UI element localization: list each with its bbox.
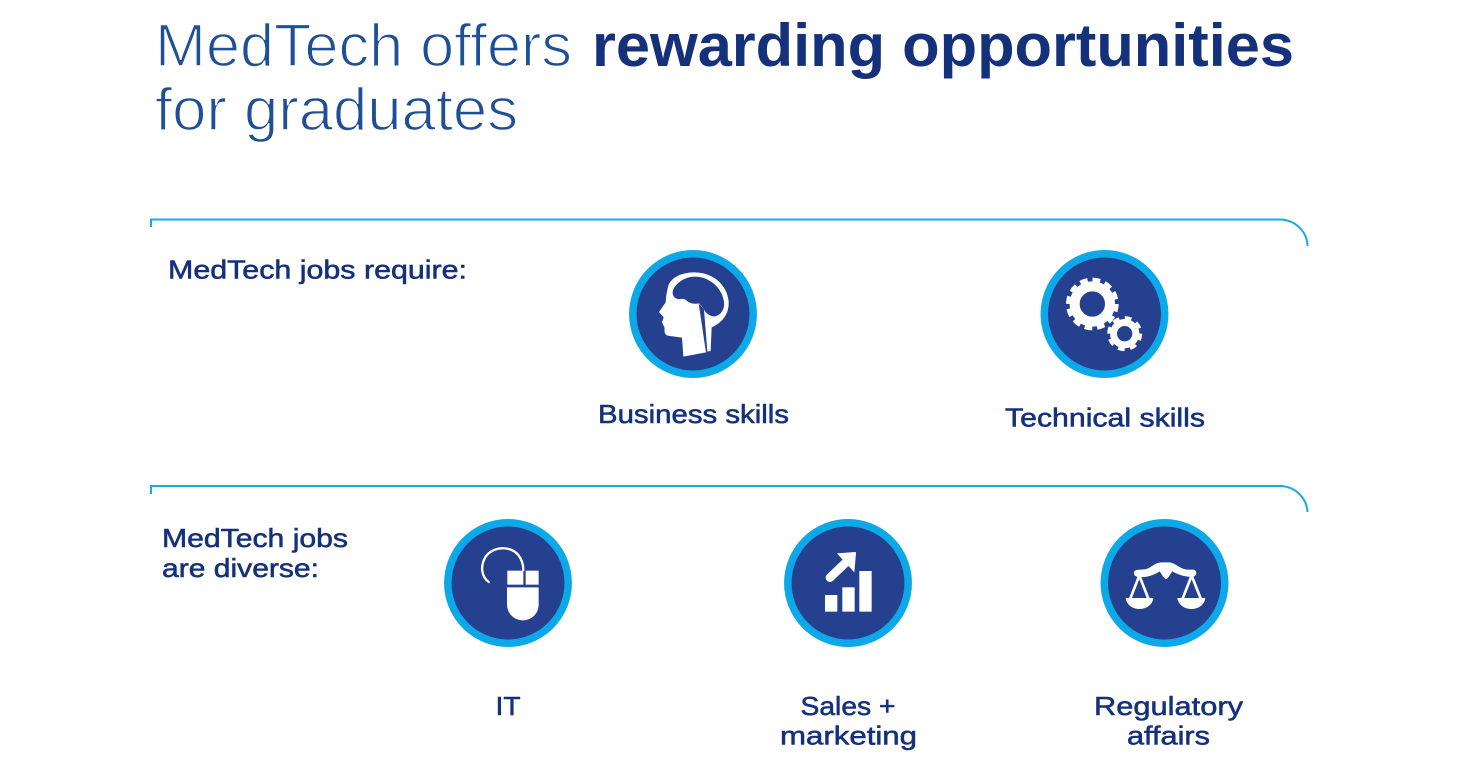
- icon: rising bar chart: [788, 523, 908, 643]
- icon: computer mouse: [448, 523, 568, 643]
- section bracket: requirements: [151, 219, 1308, 246]
- label: Regulatory affairs: Regulatory: [1094, 691, 1243, 721]
- title: rewarding opportunities: [592, 12, 1294, 79]
- label: Technical skills: Technical skills: [1005, 402, 1205, 432]
- section heading: MedTech jobs are diverse: [162, 523, 348, 583]
- icon: scales of justice: [1104, 523, 1225, 643]
- section heading: MedTech jobs are diverse: are diverse:: [162, 553, 319, 583]
- title: [155, 12, 1294, 143]
- label: Sales + marketing: marketing: [780, 720, 917, 750]
- icon: gears: [1044, 254, 1165, 374]
- label: Regulatory affairs: affairs: [1127, 720, 1210, 750]
- label: Regulatory affairs: [1094, 691, 1243, 750]
- icon: brain and head: [633, 254, 753, 374]
- section heading: MedTech jobs require: MedTech jobs require:: [168, 254, 467, 284]
- label: Sales + marketing: [780, 691, 917, 750]
- label: Sales + marketing: Sales +: [800, 691, 896, 721]
- section heading: MedTech jobs are diverse: MedTech jobs: [162, 523, 348, 553]
- section bracket: diversity: [151, 486, 1308, 512]
- title: MedTech offers: [155, 12, 572, 79]
- label: Business skills: Business skills: [598, 399, 789, 429]
- label: IT: IT: [496, 691, 521, 721]
- title: for graduates: [155, 76, 518, 143]
